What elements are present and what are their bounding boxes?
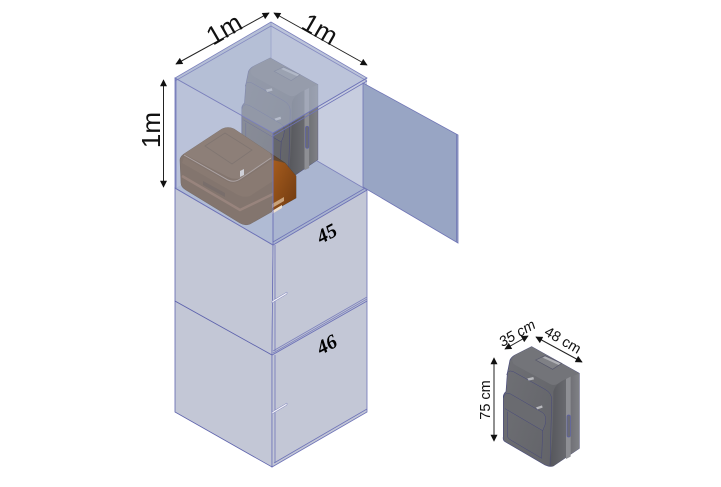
label: width 1m: 1m <box>201 7 247 51</box>
number 45: 45 <box>312 220 341 249</box>
glass top face <box>175 22 367 133</box>
gray suitcase in locker <box>242 58 318 178</box>
label: 35 cm: 35 cm <box>496 317 539 351</box>
lower locker 45 <box>175 188 367 355</box>
open door <box>363 83 458 243</box>
label: height 1m: 1m <box>136 112 166 148</box>
handle 45 <box>272 292 287 303</box>
open locker back walls <box>175 22 367 245</box>
dimension arrows: locker <box>164 13 367 187</box>
dimension arrows: suitcase <box>494 336 582 441</box>
handle 46 <box>272 403 287 414</box>
label: depth 1m: 1m <box>297 7 343 51</box>
label: 48 cm: 48 cm <box>541 324 584 358</box>
number 46: 46 <box>312 331 341 360</box>
reference suitcase <box>503 347 579 467</box>
brown suitcase in locker <box>180 128 296 225</box>
lower locker 46 <box>175 301 367 467</box>
locker frame edges <box>175 26 367 245</box>
label: 75 cm: 75 cm <box>478 380 494 420</box>
glass left face <box>175 78 273 245</box>
